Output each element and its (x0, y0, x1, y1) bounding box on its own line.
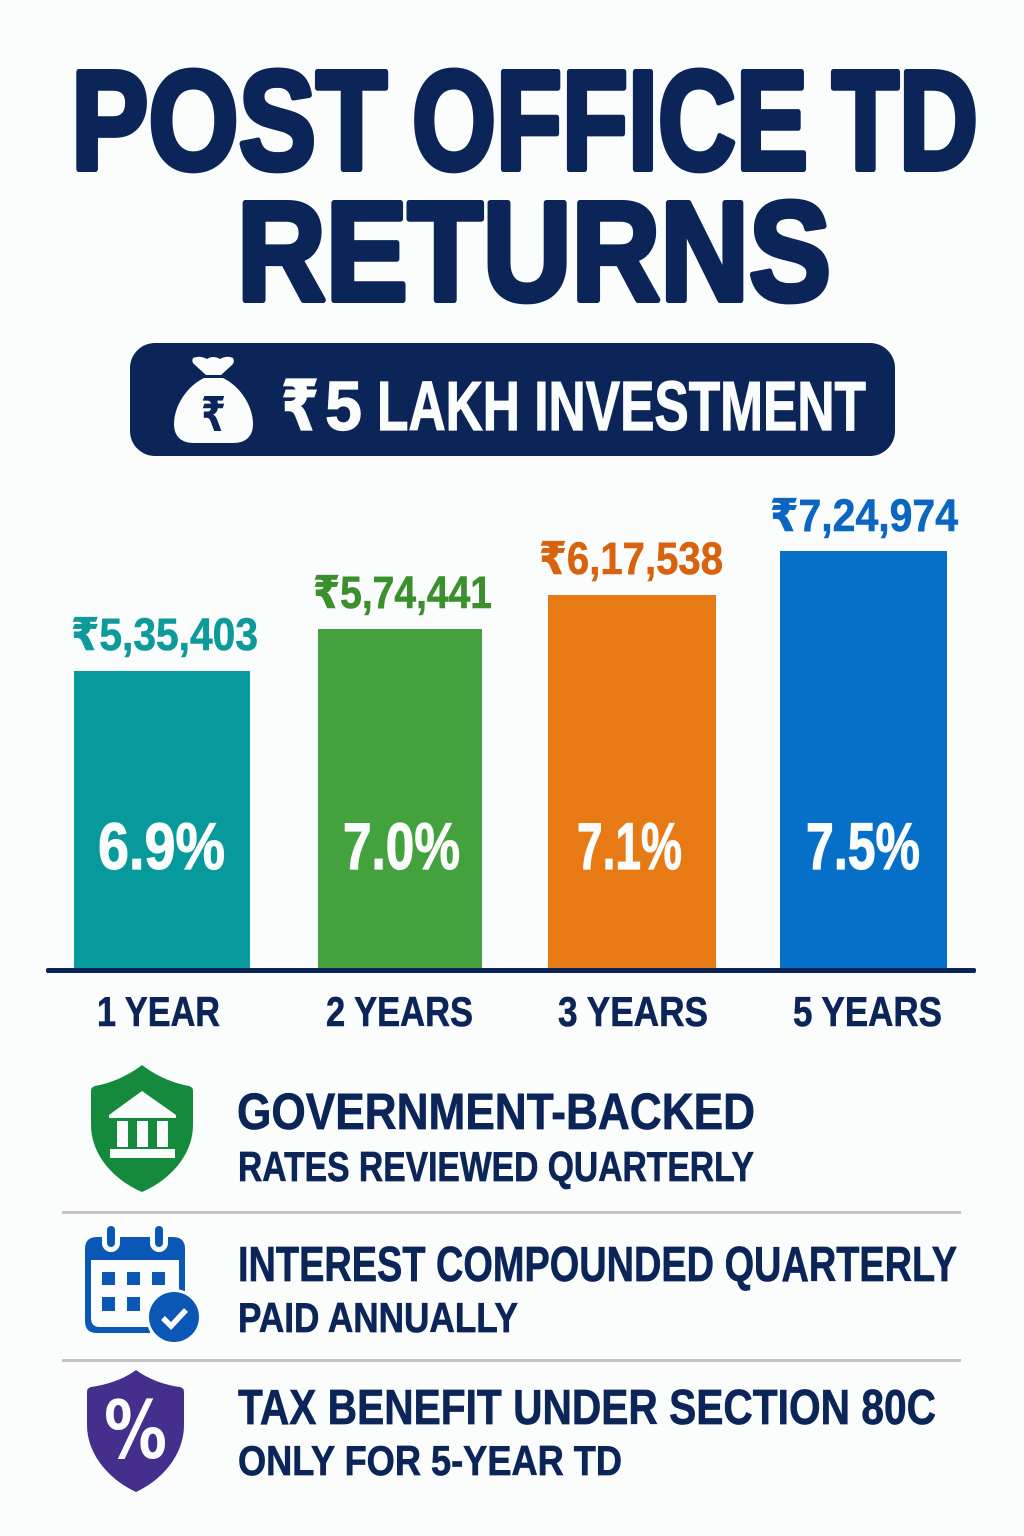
feature: interest compounded (85, 1222, 957, 1345)
feature text: GOVERNMENT-BACKED (237, 1083, 755, 1140)
axis labels: 3 YEARS (558, 988, 708, 1035)
bar: 5 years: 7.5% (806, 809, 920, 883)
feature text: RATES REVIEWED QUARTERLY (238, 1143, 754, 1190)
icon: purple shield with percent (87, 1370, 184, 1492)
axis labels: 5 YEARS (793, 988, 942, 1035)
title: RETURNS (237, 172, 831, 330)
bar: 2 years: 7.0% (343, 809, 460, 883)
icon: money bag (174, 357, 253, 443)
feature text (238, 1381, 936, 1484)
bar: 3 years: ₹6,17,538 (539, 533, 723, 584)
bar: 3 years: 7.1% (577, 809, 682, 883)
title (71, 41, 978, 330)
banner text: LAKH INVESTMENT (377, 367, 866, 445)
bar: 1 year: 6.9% (98, 809, 225, 883)
bar: 5 years (770, 490, 958, 969)
banner text: 5 (325, 367, 362, 445)
icon: green shield with bank (91, 1065, 193, 1192)
feature text (238, 1238, 957, 1341)
bar: 1 year: ₹5,35,403 (71, 609, 258, 660)
feature text (237, 1083, 755, 1190)
axis labels (97, 988, 942, 1035)
icon: purple shield with percent: % (104, 1384, 167, 1477)
bar: 5 years: ₹7,24,974 (770, 490, 958, 541)
axis labels: 1 YEAR (97, 988, 220, 1035)
icon: calendar with check (85, 1222, 202, 1345)
title: OFFICE (412, 41, 808, 199)
feature: tax benefit (87, 1370, 936, 1492)
banner: 5 lakh investment (130, 343, 895, 456)
axis labels: 2 YEARS (326, 988, 473, 1035)
banner text (281, 367, 866, 445)
banner text: ₹ (281, 367, 319, 445)
feature text: ONLY FOR 5-YEAR TD (238, 1437, 622, 1484)
title: TD (832, 41, 978, 199)
bar: 1 year (71, 609, 258, 969)
bar: 2 years: ₹5,74,441 (313, 567, 492, 618)
axis line (46, 968, 976, 973)
bar chart (46, 490, 976, 1035)
bar: 2 years (313, 567, 492, 969)
feature text: PAID ANNUALLY (238, 1294, 518, 1341)
bar: 3 years (539, 533, 723, 969)
icon: money bag: ₹ (201, 389, 226, 442)
title: POST (71, 41, 387, 199)
feature: government-backed (91, 1065, 755, 1192)
